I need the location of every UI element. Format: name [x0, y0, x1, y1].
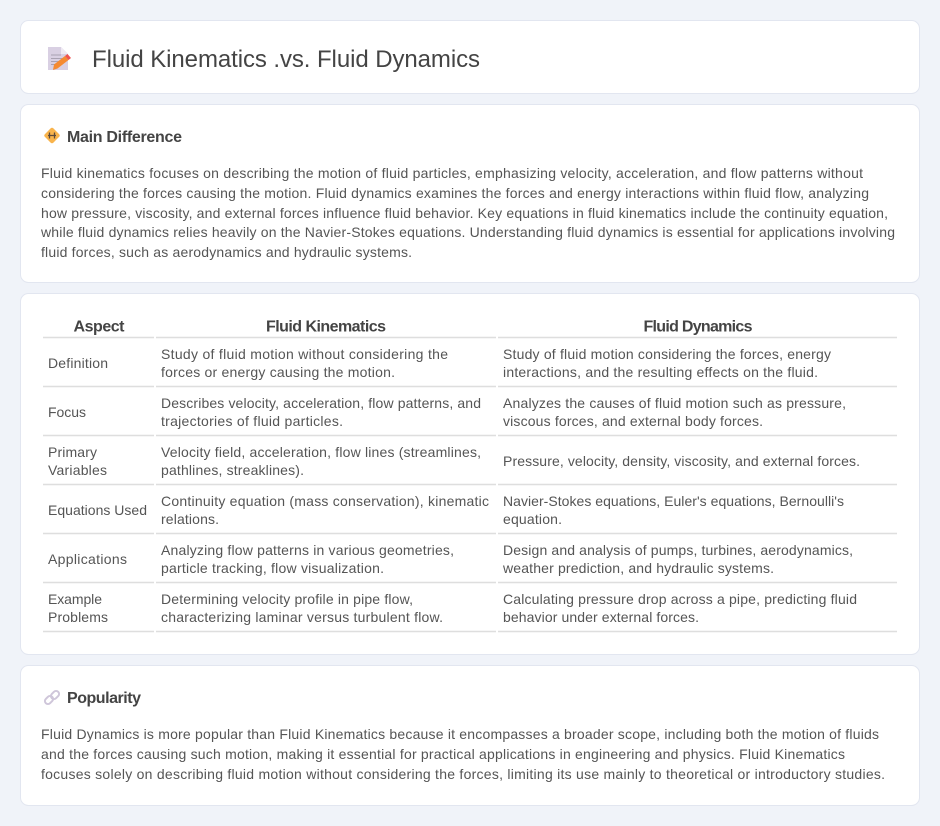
row: primary variables: Pressure, velocity, density, viscosity, and external forces. [503, 453, 860, 469]
table header row: Fluid Kinematics [266, 318, 386, 336]
title: Fluid Kinematics .vs. Fluid Dynamics [92, 46, 480, 73]
row: focus: Describes velocity, acceleration, flow patterns, and [161, 395, 481, 411]
panel: header [20, 20, 920, 94]
row: primary variables: Primary [48, 444, 97, 460]
row: focus: viscous forces, and external body forces. [503, 413, 763, 429]
row: focus: Analyzes the causes of fluid motion such as pressure, [503, 395, 846, 411]
row: equations used: equation. [503, 511, 562, 527]
row: applications: weather prediction, and hydraulic systems. [502, 560, 774, 576]
row: example problems: Determining velocity profile in pipe flow, [161, 591, 413, 607]
row: example problems: Calculating pressure drop across a pipe, predicting fluid [503, 591, 857, 607]
row: example problems: Problems [48, 609, 108, 625]
row: primary variables [48, 444, 860, 478]
table header row: Fluid Dynamics [644, 318, 753, 336]
text block: main difference paragraph: considering the forces causing the motion. Fluid dynamics examines the forces and energy interactions within fluid flow, analyzing [41, 185, 869, 201]
row: focus: Focus [48, 404, 86, 420]
row: applications: Design and analysis of pumps, turbines, aerodynamics, [503, 542, 853, 558]
row: applications [48, 542, 853, 576]
row: example problems [48, 591, 857, 625]
row: definition: forces or energy causing the motion. [161, 364, 395, 380]
row: equations used: Navier-Stokes equations, Euler's equations, Bernoulli's [503, 493, 844, 509]
row: equations used [48, 493, 844, 527]
icon: chain link [44, 690, 60, 705]
row: focus [48, 395, 846, 429]
row: example problems: behavior under external forces. [503, 609, 699, 625]
text block: main difference paragraph: how pressure, viscosity, and external forces influence fluid behavior. Key equations in fluid kinematics include the continuity equation, [41, 205, 888, 221]
table header row [74, 318, 753, 336]
row: example problems: characterizing laminar versus turbulent flow. [161, 609, 443, 625]
text block: popularity paragraph: Fluid Dynamics is more popular than Fluid Kinematics because it encompasses a broader scope, including both the motion of fluids [41, 726, 879, 742]
row: primary variables: pathlines, streaklines). [161, 462, 304, 478]
text block: main difference paragraph: Fluid kinematics focuses on describing the motion of fluid particles, emphasizing velocity, acceleration, and flow patterns without [41, 165, 863, 181]
row: equations used: Continuity equation (mass conservation), kinematic [161, 493, 489, 509]
row: applications: Analyzing flow patterns in various geometries, [161, 542, 454, 558]
heading: main difference: Main Difference [67, 129, 182, 146]
row: applications: particle tracking, flow visualization. [161, 560, 384, 576]
row: definition: Study of fluid motion without considering the [161, 346, 448, 362]
row: definition: Study of fluid motion considering the forces, energy [503, 346, 831, 362]
row: example problems: Example [48, 591, 102, 607]
row: definition: Definition [48, 355, 108, 371]
text block: popularity paragraph: and the forces causing such motion, making it essential for practical applications in engineering and physics. Fluid Kinematics [41, 746, 845, 762]
text block: popularity paragraph [41, 726, 885, 782]
text block: main difference paragraph: fluid forces, such as aerodynamics and hydraulic systems. [41, 244, 412, 260]
panel: popularity [20, 666, 920, 806]
table header row: Aspect [74, 318, 125, 336]
row: focus: trajectories of fluid particles. [161, 413, 343, 429]
row: applications: Applications [48, 551, 127, 567]
row: primary variables: Velocity field, acceleration, flow lines (streamlines, [161, 444, 481, 460]
text block: popularity paragraph: focuses solely on describing fluid motion without considering the forces, limiting its use mainly to theoretical or introductory studies. [41, 766, 885, 782]
heading: popularity: Popularity [67, 690, 141, 707]
icon: document with pencil [48, 47, 71, 70]
panel: comparison table [20, 294, 920, 654]
text block: main difference paragraph: while fluid dynamics relies heavily on the Navier-Stokes equations. Understanding fluid dynamics is essential for applications involving [40, 224, 895, 240]
row: equations used: relations. [161, 511, 219, 527]
icon: warning diamond [44, 127, 60, 144]
row: primary variables: Variables [48, 462, 107, 478]
row: definition [48, 346, 831, 380]
text block: main difference paragraph [40, 165, 895, 260]
row: equations used: Equations Used [48, 502, 147, 518]
panel: main difference [20, 104, 920, 282]
row: definition: interactions, and the resulting effects on the fluid. [503, 364, 818, 380]
